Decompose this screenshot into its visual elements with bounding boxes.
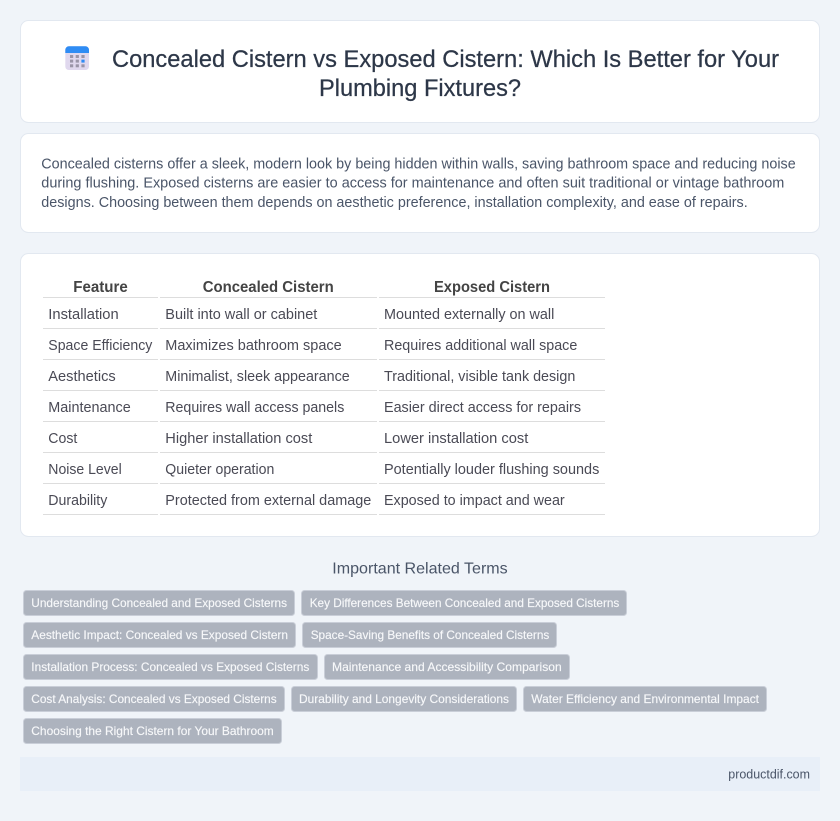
table row: maintenance: Maintenance xyxy=(48,400,131,416)
tag: space-saving: Space-Saving Benefits of Concealed Cisterns xyxy=(311,628,549,642)
icon: calendar xyxy=(65,46,89,70)
table row: noise level xyxy=(43,462,605,484)
tag: installation process xyxy=(24,654,318,680)
text block: introduction: designs. Choosing between them depends on aesthetic preference, installation complexity, and ease of repairs. xyxy=(41,195,748,211)
tag: understanding: Understanding Concealed and Exposed Cisterns xyxy=(31,596,287,610)
panel: introduction xyxy=(20,134,820,232)
panel: comparison table xyxy=(20,254,820,536)
tag: cost analysis xyxy=(24,686,284,712)
table row: cost: Higher installation cost xyxy=(165,431,312,447)
table header row: Exposed Cistern xyxy=(434,279,550,296)
tag: installation process: Installation Process: Concealed vs Exposed Cisterns xyxy=(31,660,309,674)
table row: maintenance: Requires wall access panels xyxy=(165,400,344,416)
table row: installation: Mounted externally on wall xyxy=(384,307,554,323)
tag: durability: Durability and Longevity Considerations xyxy=(299,692,509,706)
table header row: Feature xyxy=(73,279,128,296)
tag: choosing: Choosing the Right Cistern for Your Bathroom xyxy=(31,724,274,738)
tag: maintenance xyxy=(324,654,570,680)
table row: maintenance xyxy=(43,400,605,422)
table row: space efficiency xyxy=(43,338,605,360)
tag: durability xyxy=(292,686,516,712)
table row: aesthetics: Minimalist, sleek appearance xyxy=(165,369,350,385)
table header row xyxy=(43,279,605,298)
table row: space efficiency: Requires additional wall space xyxy=(384,338,577,354)
title: Plumbing Fixtures? xyxy=(319,75,521,102)
tag: water efficiency xyxy=(524,686,766,712)
text block: introduction: during flushing. Exposed cisterns are easier to access for maintenance and often suit traditional or vintage bathroom xyxy=(41,176,784,192)
title xyxy=(112,46,779,102)
table row: noise level: Potentially louder flushing sounds xyxy=(384,462,599,478)
tag: cost analysis: Cost Analysis: Concealed vs Exposed Cisterns xyxy=(31,692,277,706)
footer xyxy=(20,757,820,791)
table row: durability: Durability xyxy=(48,493,108,509)
table row: maintenance: Easier direct access for repairs xyxy=(384,400,581,416)
tag: aesthetic impact: Aesthetic Impact: Concealed vs Exposed Cistern xyxy=(31,628,288,642)
table row: aesthetics: Traditional, visible tank design xyxy=(384,369,575,385)
footer: productdif.com xyxy=(728,766,810,781)
tag: key differences: Key Differences Between Concealed and Exposed Cisterns xyxy=(310,596,619,610)
table row: space efficiency: Maximizes bathroom space xyxy=(165,338,342,354)
table row: noise level: Noise Level xyxy=(48,462,122,478)
text block: introduction: Concealed cisterns offer a sleek, modern look by being hidden within walls, saving bathroom space and reducing noise xyxy=(41,156,796,172)
table row: durability: Exposed to impact and wear xyxy=(384,493,565,509)
table row: installation xyxy=(43,307,605,329)
table row: noise level: Quieter operation xyxy=(165,462,274,478)
tag: space-saving xyxy=(302,622,556,648)
tag: water efficiency: Water Efficiency and Environmental Impact xyxy=(531,692,760,706)
table row: cost xyxy=(43,431,605,453)
tag: aesthetic impact xyxy=(24,622,296,648)
table row: installation: Built into wall or cabinet xyxy=(165,307,317,323)
table row: durability xyxy=(43,493,605,515)
table row: aesthetics xyxy=(43,369,605,391)
tag: choosing xyxy=(24,718,282,744)
table header row: Concealed Cistern xyxy=(203,279,334,296)
table row: cost: Lower installation cost xyxy=(384,431,528,447)
panel: related term tags xyxy=(24,590,766,744)
table row: durability: Protected from external damage xyxy=(165,493,371,509)
table row: cost: Cost xyxy=(48,431,77,447)
text block: introduction xyxy=(41,156,796,211)
table row: aesthetics: Aesthetics xyxy=(48,369,116,385)
table row: installation: Installation xyxy=(48,307,119,323)
panel: title header xyxy=(20,20,820,122)
tag: key differences xyxy=(302,590,626,616)
tag: maintenance: Maintenance and Accessibility Comparison xyxy=(332,660,562,674)
heading: important related terms: Important Related Terms xyxy=(332,560,508,577)
table row: space efficiency: Space Efficiency xyxy=(48,338,153,354)
tag: understanding xyxy=(24,590,294,616)
title: Concealed Cistern vs Exposed Cistern: Which Is Better for Your xyxy=(112,46,779,73)
